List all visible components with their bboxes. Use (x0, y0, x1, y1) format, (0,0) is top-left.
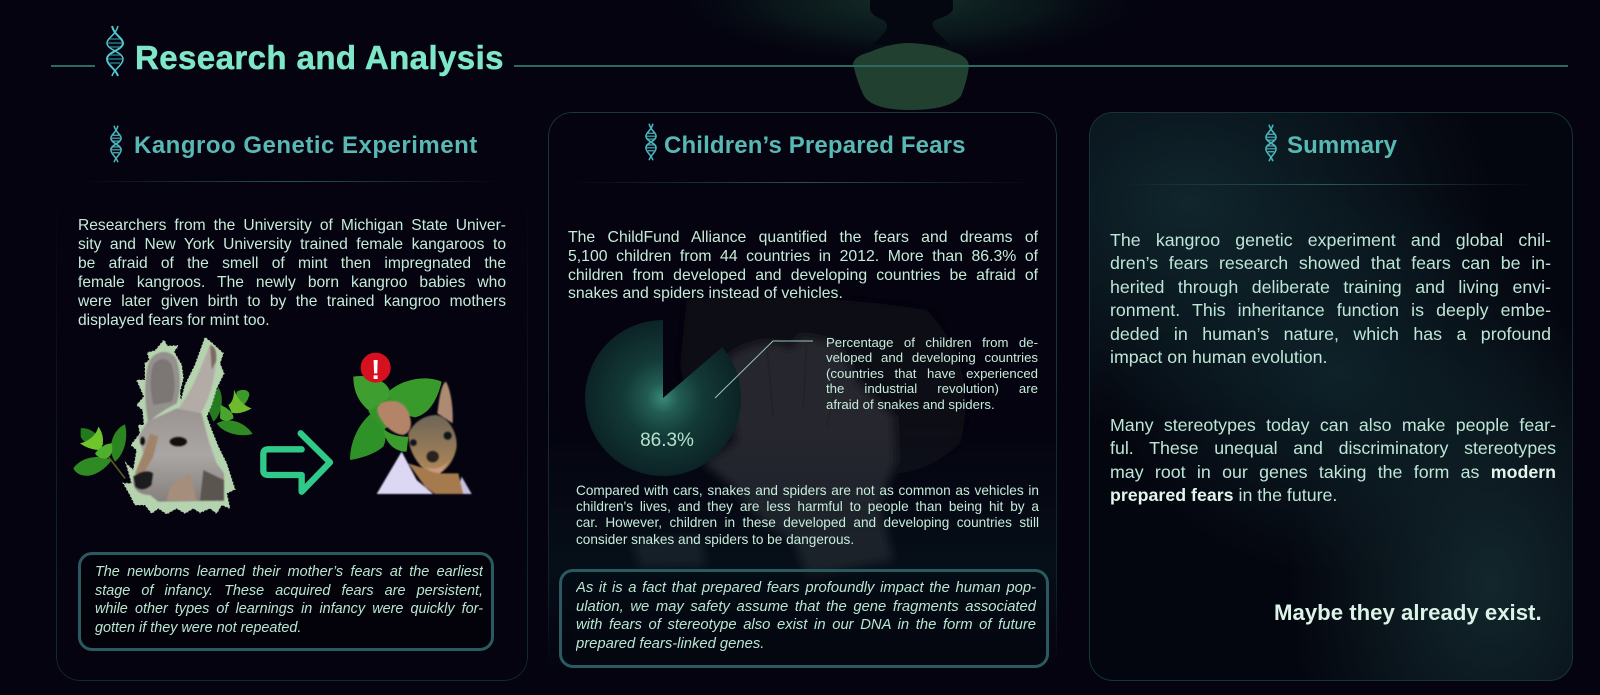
text: summary first paragraph: ronment. This inheritance function is deeply embe- (1110, 300, 1551, 320)
text: percentage note: afraid of snakes and spiders. (826, 397, 995, 412)
icon: DNA helix (645, 124, 657, 160)
heading: Children’s Prepared Fears (664, 132, 966, 159)
value: 86.3% (640, 430, 694, 451)
text: summary second paragraph: Many stereotypes today can also make people fear- (1110, 415, 1556, 435)
text: ChildFund findings: The ChildFund Alliance quantified the fears and dreams of (568, 229, 1038, 246)
text: cars comparison: children's lives, and they are less harmful to people than being hit by a (576, 499, 1039, 514)
text: cars comparison: consider snakes and spiders to be dangerous. (576, 532, 854, 547)
kangaroo spiky halo (123, 337, 235, 514)
text: summary second paragraph: prepared fears in the future. (1110, 485, 1337, 505)
text: experiment description: were later given birth to by the trained kangroo mothers (78, 293, 506, 310)
baby kangaroo (377, 382, 472, 494)
text: summary first paragraph: dren’s fears research showed that fears can be in- (1110, 253, 1551, 273)
text: experiment description: female kangroos. The newly born kangroo babies who (78, 274, 506, 291)
text: experiment description: displayed fears for mint too. (78, 312, 270, 329)
text: cars comparison (576, 483, 1039, 547)
callout: newborns: gotten if they were not repeated. (95, 620, 301, 636)
text: percentage note: veloped and developing countries (826, 350, 1038, 365)
callout: newborns: stage of infancy. These acquired fears are persistent, (95, 583, 483, 599)
text: summary first paragraph: The kangroo genetic experiment and global chil- (1110, 230, 1551, 250)
header: section title (51, 26, 1568, 76)
arrow (263, 433, 330, 492)
text: experiment description: sity and New York University trained female kangaroos to (78, 236, 506, 253)
text: ChildFund findings (568, 229, 1038, 302)
pie chart: 86.3% (585, 320, 813, 476)
callout: future fears: As it is a fact that prepared fears profoundly impact the human pop- (576, 580, 1036, 596)
icon: DNA helix (106, 26, 124, 76)
text: summary first paragraph (1110, 230, 1551, 367)
text: experiment description: Researchers from the University of Michigan State Univer- (78, 217, 506, 234)
header rule left (51, 65, 95, 67)
mint sprig right (208, 387, 253, 435)
text: summary second paragraph: ful. These unequal and discriminatory stereotypes (1110, 438, 1556, 458)
header rule right (514, 65, 1568, 67)
text: percentage note (826, 335, 1038, 412)
alert badge (361, 353, 391, 385)
text: ChildFund findings: 5,100 children from 44 countries in 2012. More than 86.3% of (568, 248, 1038, 265)
background photo: child covering face with hand (632, 296, 966, 572)
text: ChildFund findings: snakes and spiders instead of vehicles. (568, 285, 843, 302)
illustration: kangaroo mother to baby inheritance (73, 338, 472, 514)
icon: DNA helix (1265, 124, 1277, 162)
text: summary first paragraph: deded in human’s nature, which has a profound (1110, 324, 1551, 344)
text: experiment description (78, 217, 506, 329)
callout: newborns: The newborns learned their mother’s fears at the earliest (95, 564, 483, 580)
leader line (715, 341, 813, 398)
callout: future fears (559, 569, 1049, 668)
text: experiment description: be afraid of the smell of mint then impregnated the (78, 255, 506, 272)
alert badge: ! (371, 354, 380, 385)
text: percentage note: (countries that have experienced (826, 366, 1038, 381)
title text: Research and Analysis (135, 39, 504, 76)
callout: future fears: ulation, we may safety assume that the gene fragments associated (576, 599, 1036, 615)
panel: summary (1089, 112, 1573, 681)
panel: children's prepared fears (548, 112, 1057, 681)
text: percentage note: Percentage of children from de- (826, 335, 1038, 350)
background: ceiling lamp (732, 0, 1087, 110)
text: cars comparison: Compared with cars, snakes and spiders are not as common as vehicles in (576, 483, 1039, 498)
text: ChildFund findings: children from developed and developing countries be afraid of (568, 267, 1038, 284)
heading: Kangroo Genetic Experiment (134, 132, 478, 159)
text: summary second paragraph: may root in our genes taking the form as modern (1110, 462, 1556, 482)
callout: newborns: while other types of learnings in infancy were quickly for- (95, 601, 483, 617)
mint leaves behind baby (350, 376, 442, 460)
text: cars comparison: car. However, children in these developed and developing countries still (576, 515, 1039, 530)
callout: future fears: prepared fears-linked genes. (576, 636, 764, 652)
callout: newborns (78, 552, 494, 651)
callout: future fears: with fears of stereotype also exist in our DNA in the form of future (576, 617, 1036, 633)
text: percentage note: the industrial revolution) are (826, 381, 1038, 396)
closing statement: Maybe they already exist. (1274, 600, 1542, 625)
text: summary first paragraph: impact on human evolution. (1110, 347, 1327, 367)
text: summary second paragraph (1110, 415, 1556, 505)
icon: DNA helix (110, 126, 122, 162)
text: summary first paragraph: herited through deliberate training and living envi- (1110, 277, 1551, 297)
heading: Summary (1287, 132, 1397, 159)
mint sprig left (73, 424, 126, 478)
kangaroo photo (133, 345, 224, 502)
panel: kangaroo genetic experiment (56, 114, 528, 681)
